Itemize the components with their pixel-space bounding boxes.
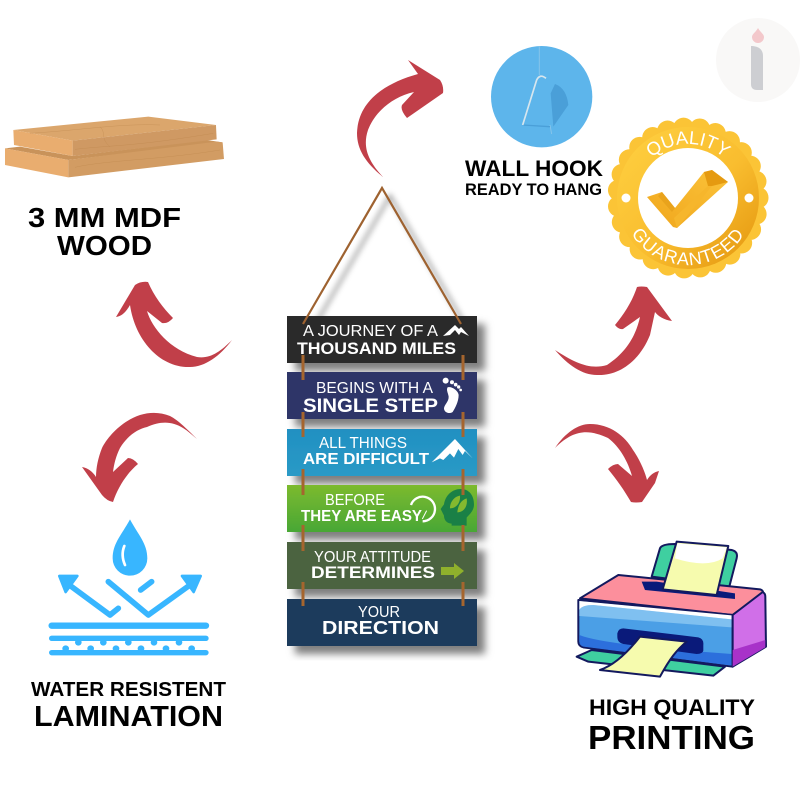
panel: plank 5: [287, 542, 477, 589]
ropes between planks: [303, 355, 463, 606]
panel: plank 4: THEY ARE EASY: [301, 508, 423, 525]
arrow: to quality badge: [555, 286, 672, 375]
label: 3 mm mdf wood: WOOD: [57, 230, 152, 261]
label: wall hook: READY TO HANG: [465, 181, 602, 199]
panel: plank 1: THOUSAND MILES: [297, 340, 456, 358]
badge: quality guaranteed: GUARANTEED: [634, 229, 742, 266]
icon: clock and head: [411, 489, 474, 526]
panel: plank 1: A JOURNEY OF A: [303, 323, 438, 340]
panel: plank 6: DIRECTION: [322, 618, 439, 638]
panel: plank 5: YOUR ATTITUDE: [314, 549, 431, 566]
icon: wood planks: [5, 117, 224, 177]
label: water resistent lamination: [31, 679, 226, 733]
icon: check mark: [647, 170, 728, 228]
panel: plank 3: [287, 429, 477, 476]
panel: plank 6: [287, 599, 477, 646]
label: wall hook: WALL HOOK: [465, 156, 603, 181]
icon: mountain: [432, 439, 473, 462]
panel: plank 4: BEFORE: [325, 492, 385, 509]
badge: quality guaranteed: QUALITY: [647, 131, 732, 156]
label: high quality printing: HIGH QUALITY: [589, 695, 755, 720]
hanging sign: [287, 188, 477, 646]
panel: plank 3: ARE DIFFICULT: [303, 451, 429, 468]
panel: plank 4: [287, 485, 477, 532]
panel: plank 3: ALL THINGS: [319, 435, 407, 452]
icon: footprint: [443, 378, 462, 413]
label: high quality printing: [588, 695, 755, 756]
arrow: to wall hook: [357, 60, 443, 177]
panel: plank 2: [287, 372, 477, 419]
label: 3 mm mdf wood: [28, 202, 181, 261]
panel: plank 2: SINGLE STEP: [303, 396, 438, 417]
badge: quality guaranteed: [608, 118, 768, 278]
icon: wall hook: [491, 46, 592, 147]
label: water resistent lamination: LAMINATION: [34, 701, 223, 733]
panel: plank 2: BEGINS WITH A: [316, 380, 434, 397]
watermark logo: [716, 18, 800, 102]
label: water resistent lamination: WATER RESISTENT: [31, 679, 226, 701]
icon: water resistant: [52, 519, 206, 653]
panel: plank 5: DETERMINES: [311, 563, 435, 582]
arrow: to wood: [116, 282, 232, 367]
label: wall hook: [465, 156, 603, 199]
label: 3 mm mdf wood: 3 MM MDF: [28, 202, 181, 233]
label: high quality printing: PRINTING: [588, 719, 755, 756]
panel: plank 1: [287, 316, 477, 363]
rope shadow: [311, 196, 469, 332]
arrow: to lamination: [82, 413, 197, 502]
icon: printer: [577, 542, 766, 677]
icon: arrow: [441, 563, 464, 579]
arrow: to printer: [555, 424, 659, 502]
icon: small mountain: [443, 325, 469, 336]
rope: top triangle: [303, 188, 461, 324]
panel: plank 6: YOUR: [358, 604, 400, 621]
